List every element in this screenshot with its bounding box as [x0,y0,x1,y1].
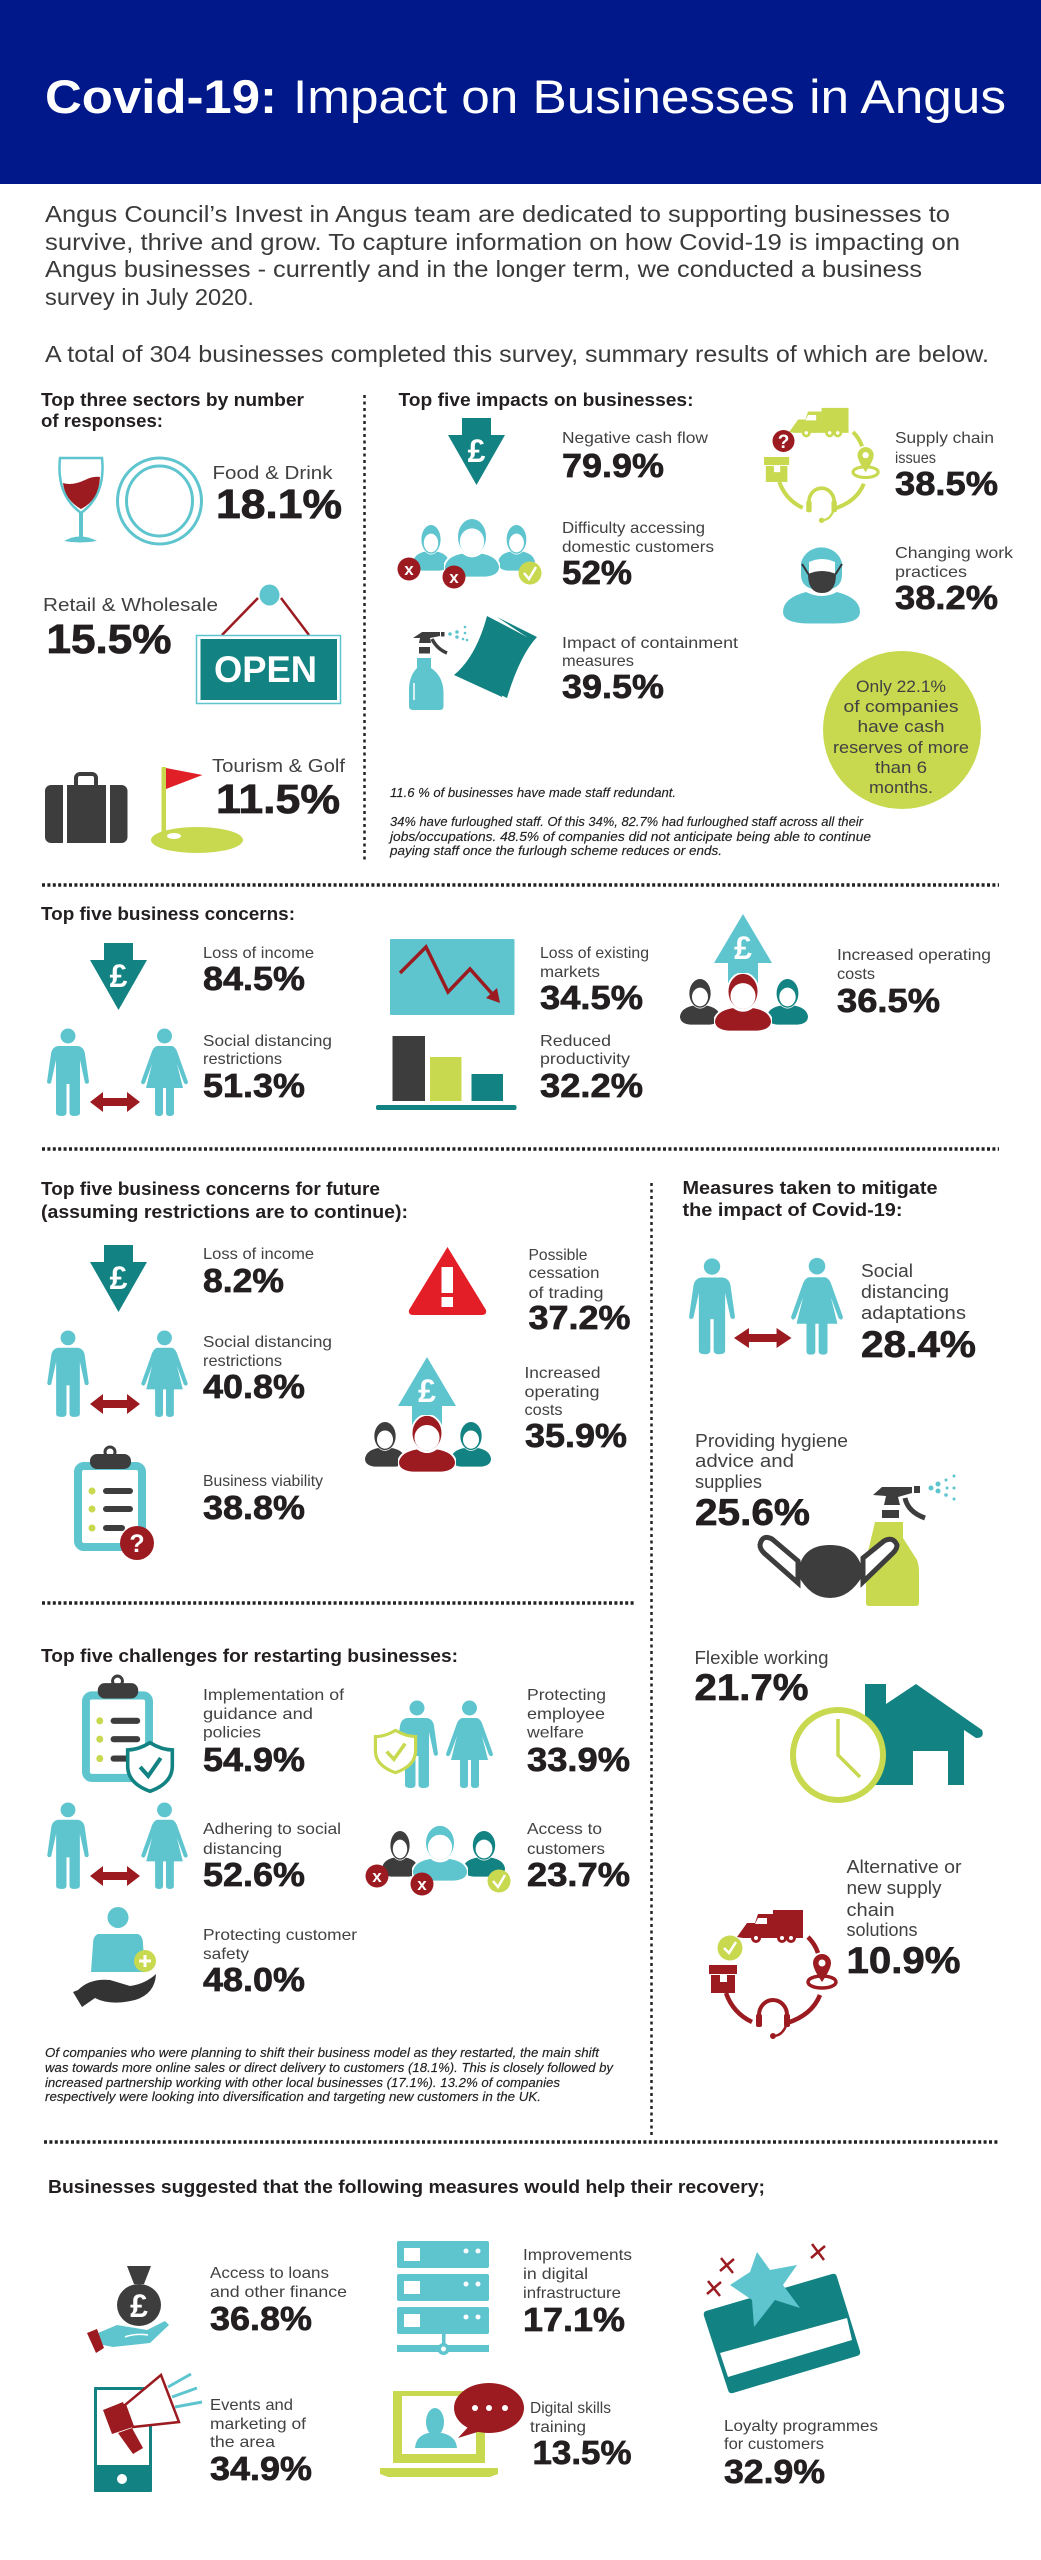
stat: flexible working: 21.7% [694,1667,808,1708]
stat: supply chain issues [895,430,998,502]
stat: retail and wholesale [43,595,218,662]
stat: loss of income: 84.5% [203,960,305,997]
stat: social distancing restrictions: restrictions [203,1051,282,1068]
stat: protecting employee welfare [526,1687,630,1778]
stat: supply chain issues: 38.5% [895,465,998,502]
stat: digital skills training: training [530,2419,586,2436]
stat: access to customers [527,1821,630,1893]
icon: phone and megaphone [94,2374,202,2492]
icon: rising costs and staff [680,914,808,1032]
stat: tourism and golf [212,756,346,822]
stat: protecting customer safety: safety [203,1946,249,1963]
stat: future social distancing: 40.8% [203,1368,305,1405]
stat: domestic customers: 52% [562,554,632,591]
stat: cessation of trading: 37.2% [528,1299,630,1336]
stat: loss of existing markets [540,945,649,1016]
icon: clipboard with question: ? [129,1530,145,1558]
stat: adhering to social distancing: Adhering to social [203,1821,341,1838]
stat: reduced productivity: productivity [540,1051,630,1068]
intro text: survey in July 2020. [45,284,254,310]
stat: future increased operating costs: 35.9% [525,1417,627,1454]
stat: hygiene advice: advice and [695,1451,794,1471]
stat: social distancing restrictions: 51.3% [203,1067,305,1104]
stat: future loss of income [203,1246,314,1299]
icon: down arrow pound: £ [468,433,486,469]
heading: future concerns [41,1179,408,1222]
heading: top five business concerns: Top five business concerns: [41,904,295,924]
stat: containment measures [562,635,739,705]
stat: alternative supply chain [846,1857,962,1981]
stat: protecting employee welfare: 33.9% [527,1741,630,1778]
stat: business viability: 38.8% [203,1489,305,1526]
stat: access to loans [210,2265,347,2337]
icon: money bag in hand [87,2266,169,2353]
icon: employees with shield [375,1700,493,1788]
stat: access to loans: and other finance [210,2284,347,2301]
stat: alternative supply chain: 10.9% [846,1940,960,1981]
stat: access to loans: 36.8% [210,2300,312,2337]
icon: spray bottle and mask [760,1474,956,1606]
stat: social distancing adaptations: adaptations [861,1303,966,1323]
stat: retail and wholesale: Retail & Wholesale [43,595,218,615]
icon: social distancing [47,1330,188,1417]
stat: reduced productivity: Reduced [540,1033,611,1050]
icon: money bag in hand: £ [130,2288,148,2324]
stat: loss of existing markets: Loss of existing [540,945,649,962]
icon: down arrow pound [448,418,505,485]
icon: down arrow pound: £ [110,1260,128,1296]
heading: top three sectors [41,390,304,431]
stat: reduced productivity [540,1033,643,1104]
note: business model shift: Of companies who were planning to shift their business model as they restarted, the main shift [45,2046,600,2060]
stat: implementation of guidance: Implementation of [203,1687,345,1704]
callout: cash reserves: have cash [858,717,944,736]
stat: negative cash flow: Negative cash flow [562,430,708,447]
note: business model shift: increased partnership working with other local businesses (17.1%). 13.2% of companies [45,2076,560,2090]
stat: access to customers: Access to [527,1821,602,1838]
stat: future social distancing [203,1334,332,1405]
heading: top three sectors: Top three sectors by number [41,390,304,410]
icon: spray and cloth [409,616,537,710]
stat: alternative supply chain: solutions [846,1920,918,1940]
stat: loss of existing markets: 34.5% [540,979,643,1016]
icon: plate [118,458,202,544]
stat: loss of existing markets: markets [540,964,600,981]
note: business model shift [45,2046,614,2104]
heading: future concerns: Top five business concerns for future [41,1179,380,1199]
callout: cash reserves: than 6 [875,758,927,777]
stat: events and marketing: Events and [210,2397,293,2414]
stat: future social distancing: Social distancing [203,1334,332,1351]
stat: future loss of income: Loss of income [203,1246,314,1263]
stat: events and marketing: the area [210,2434,275,2451]
stat: hygiene advice: 25.6% [695,1492,810,1533]
stat: protecting customer safety: 48.0% [203,1961,305,1998]
icon: down arrow pound: £ [110,958,128,994]
icon: rising costs and staff: £ [734,930,752,966]
header banner [0,0,1041,184]
stat: alternative supply chain: Alternative or [846,1857,962,1877]
title: Impact on Businesses in Angus [293,70,1006,123]
heading: measures taken [682,1178,938,1220]
stat: social distancing adaptations [861,1261,976,1365]
heading: restart challenges: Top five challenges for restarting businesses: [41,1646,458,1666]
stat: protecting customer safety [203,1927,358,1998]
intro text: Angus businesses - currently and in the longer term, we conducted a business [45,256,922,282]
stat: events and marketing [210,2397,312,2487]
stat: increased operating costs: 36.5% [837,982,940,1019]
icon: access to customers: x [417,1875,427,1894]
stat: changing work practices: 38.2% [895,579,998,616]
stat: protecting employee welfare: employee [527,1706,605,1723]
heading: future concerns: (assuming restrictions are to continue): [41,1202,408,1222]
title [45,70,1006,123]
stat: future loss of income: 8.2% [203,1262,284,1299]
icon: social distancing large [689,1258,843,1355]
icon: supply chain lime: ? [778,432,789,453]
icon: warning triangle [409,1247,486,1315]
stat: business viability [203,1473,323,1526]
stat: cessation of trading [528,1247,630,1336]
stat: implementation of guidance: 54.9% [203,1741,305,1778]
stat: social distancing adaptations: distancing [861,1282,949,1302]
stat: adhering to social distancing [203,1821,341,1893]
icon: access to customers [366,1825,510,1896]
stat: loss of income [203,945,314,997]
stat: containment measures: Impact of containment [562,635,739,652]
stat: flexible working: Flexible working [694,1648,828,1668]
stat: protecting customer safety: Protecting customer [203,1927,358,1944]
icon: open sign [196,584,340,704]
stat: adhering to social distancing: 52.6% [203,1856,305,1893]
note: business model shift: respectively were looking into diversification and targeting new customers in the UK. [45,2090,541,2104]
icon: customers: x [449,568,459,587]
stat: alternative supply chain: chain [846,1900,894,1920]
callout: cash reserves [823,651,981,809]
stat: negative cash flow [562,430,708,484]
stat: changing work practices: practices [895,564,967,581]
stat: protecting employee welfare: Protecting [527,1687,606,1704]
stat: digital skills training [530,2400,632,2471]
icon: access to customers: x [372,1867,382,1886]
note: staff redundancy and furlough: 34% have furloughed staff. Of this 34%, 82.7% had furloughed staff across all their [390,815,864,829]
stat: flexible working [694,1648,828,1708]
stat: domestic customers [562,520,714,591]
stat: implementation of guidance: policies [203,1724,261,1742]
stat: cessation of trading: cessation [528,1265,600,1282]
stat: digital infrastructure: Improvements [523,2247,632,2264]
stat: adhering to social distancing: distancing [203,1841,282,1858]
icon: clock and house [793,1684,983,1800]
stat: loyalty programmes: 32.9% [724,2453,825,2490]
icon: bar chart [376,1036,516,1110]
icon: wine glass [59,458,103,542]
note: staff redundancy and furlough: 11.6 % of businesses have made staff redundant. [390,786,676,800]
icon: rising costs and staff: £ [418,1373,436,1409]
stat: loyalty programmes: Loyalty programmes [724,2418,878,2435]
stat: digital infrastructure [523,2247,632,2338]
stat: containment measures: 39.5% [562,668,664,705]
stat: reduced productivity: 32.2% [540,1067,643,1104]
icon: social distancing [47,1028,188,1116]
stat: supply chain issues: issues [895,450,936,467]
note: staff redundancy and furlough: jobs/occupations. 48.5% of companies did not anticipate being able to continue [388,830,871,844]
stat: increased operating costs: Increased operating [837,947,991,964]
stat: hygiene advice: supplies [695,1472,762,1492]
stat: future increased operating costs: Increased [524,1365,600,1382]
stat: changing work practices: Changing work [895,545,1014,562]
heading: measures taken: Measures taken to mitigate [682,1178,938,1198]
heading: top three sectors: of responses: [41,411,163,431]
stat: future increased operating costs [524,1365,627,1454]
stat: digital infrastructure: in digital [523,2266,588,2283]
stat: loyalty programmes: for customers [724,2436,824,2453]
stat: implementation of guidance [203,1687,345,1778]
stat: alternative supply chain: new supply [846,1878,942,1898]
heading: recovery measures: Businesses suggested that the following measures would help their recovery; [48,2177,765,2197]
callout: cash reserves: Only 22.1% [856,677,946,696]
intro text [45,201,989,367]
stat: social distancing restrictions: Social distancing [203,1033,332,1050]
stat: implementation of guidance: guidance and [203,1706,313,1723]
note: staff redundancy and furlough: paying staff once the furlough scheme reduces or ends. [389,844,722,858]
stat: food and drink [212,463,342,527]
icon: protected customer in hand [73,1907,156,2007]
stat: increased operating costs: costs [837,966,875,983]
stat: future social distancing: restrictions [203,1353,282,1370]
intro text: survive, thrive and grow. To capture information on how Covid-19 is impacting on [45,229,960,255]
stat: business viability: Business viability [203,1473,323,1490]
intro text: Angus Council’s Invest in Angus team are dedicated to supporting businesses to [45,201,950,227]
callout: cash reserves: of companies [844,697,958,716]
icon: supply chain lime [764,408,878,523]
icon: clipboard with shield [86,1676,172,1791]
stat: events and marketing: marketing of [210,2416,307,2433]
stat: loss of income: Loss of income [203,945,314,962]
note: business model shift: was towards more online sales or direct delivery to customers (18.1%). This is closely followed by [45,2061,614,2075]
icon: suitcase [45,774,128,843]
icon: supply chain red [709,1910,836,2039]
icon: falling line chart [390,939,514,1015]
callout: cash reserves: reserves of more [833,738,969,757]
title: Covid-19: [45,70,277,123]
icon: down arrow pound [90,943,147,1010]
stat: domestic customers: Difficulty accessing [562,520,705,537]
stat: loyalty programmes [724,2418,878,2490]
stat: cessation of trading: of trading [528,1285,604,1302]
icon: masked person [783,547,860,624]
icon: customers: x [404,560,414,579]
stat: tourism and golf: 11.5% [216,776,340,822]
icon: social distancing [47,1802,188,1889]
stat: domestic customers: domestic customers [562,539,714,556]
callout: cash reserves: months. [869,778,933,797]
heading: top five impacts: Top five impacts on businesses: [398,390,694,410]
icon: golf flag [151,767,243,853]
note: staff redundancy and furlough [388,786,871,858]
stat: access to customers: 23.7% [527,1856,630,1893]
icon: laptop and speech bubble [380,2383,524,2477]
stat: digital infrastructure: 17.1% [523,2301,625,2338]
stat: food and drink: 18.1% [216,481,342,527]
stat: future increased operating costs: operating [524,1384,600,1401]
stat: access to loans: Access to loans [210,2265,329,2282]
stat: hygiene advice [695,1431,848,1533]
icon: customers [398,518,542,588]
stat: tourism and golf: Tourism & Golf [212,756,346,776]
icon: rising costs and staff [365,1357,491,1473]
icon: open sign: OPEN [214,649,317,690]
stat: supply chain issues: Supply chain [895,430,994,447]
stat: changing work practices [895,545,1014,616]
stat: social distancing adaptations: 28.4% [861,1324,976,1365]
stat: digital skills training: 13.5% [532,2434,632,2471]
stat: food and drink: Food & Drink [212,463,334,483]
stat: access to customers: customers [527,1841,605,1858]
heading: measures taken: the impact of Covid-19: [682,1200,902,1220]
stat: hygiene advice: Providing hygiene [695,1431,848,1451]
stat: digital infrastructure: infrastructure [523,2285,621,2302]
stat: digital skills training: Digital skills [530,2400,611,2417]
stat: cessation of trading: Possible [528,1247,588,1264]
icon: loyalty card with star [704,2244,860,2393]
stat: containment measures: measures [562,653,634,670]
intro text: A total of 304 businesses completed this survey, summary results of which are below. [45,341,989,367]
stat: protecting employee welfare: welfare [526,1724,584,1742]
icon: down arrow pound [90,1245,147,1312]
stat: future increased operating costs: costs [524,1402,562,1419]
stat: retail and wholesale: 15.5% [46,616,172,662]
icon: server stack [397,2241,489,2355]
stat: events and marketing: 34.9% [210,2450,312,2487]
stat: negative cash flow: 79.9% [562,447,664,484]
stat: social distancing adaptations: Social [861,1261,913,1281]
stat: increased operating costs [837,947,991,1019]
icon: clipboard with question [78,1447,154,1560]
stat: social distancing restrictions [203,1033,332,1104]
